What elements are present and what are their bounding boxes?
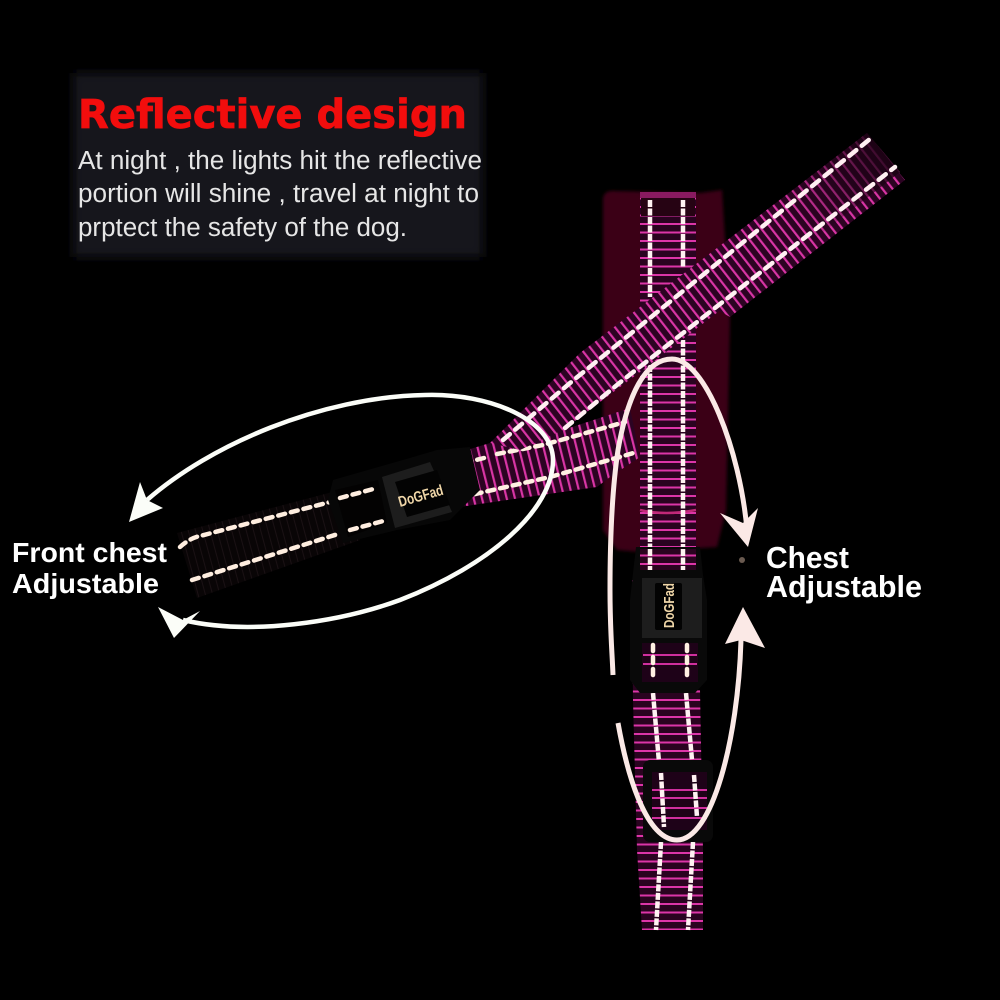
logo: DoGFad horizontal: DoGFad — [396, 482, 445, 511]
text block: description: portion will shine , travel at night to — [78, 180, 479, 208]
harness pad: burgundy fleece — [603, 190, 730, 552]
vertical strap: lower — [632, 580, 703, 930]
arrow: front chest adjustable — [129, 395, 553, 638]
text block: description — [78, 147, 482, 242]
label: front chest adjustable: Adjustable — [12, 568, 159, 599]
text block: description: prptect the safety of the dog. — [78, 214, 407, 242]
black strap: left end — [177, 490, 360, 598]
heading: reflective design: Reflective design — [78, 92, 467, 138]
label: chest adjustable: Chest — [766, 541, 849, 575]
buckle: vertical — [630, 547, 707, 693]
label: chest adjustable: Adjustable — [766, 570, 922, 604]
under strap: diagonal — [700, 150, 905, 317]
text block: description: At night , the lights hit the reflective — [78, 147, 482, 175]
logo: DoGFad vertical: DoGFad — [661, 583, 678, 628]
label: chest adjustable — [766, 541, 922, 604]
short strap: junction to buckle — [452, 408, 640, 507]
buckle: horizontal — [328, 447, 480, 543]
label: front chest adjustable: Front chest — [12, 537, 167, 568]
vertical strap: upper — [640, 192, 696, 570]
arrow: chest adjustable — [610, 359, 765, 840]
panel: reflective design — [73, 73, 483, 257]
slider: lower strap — [643, 760, 713, 842]
main strap: diagonal — [490, 133, 900, 450]
label: front chest adjustable — [12, 537, 167, 599]
